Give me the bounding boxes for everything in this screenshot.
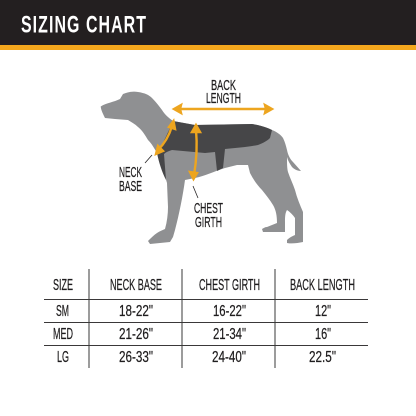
dog silhouette (101, 92, 303, 244)
row: MED: 21-26" (119, 326, 153, 343)
row: SM: SM (56, 303, 69, 320)
row: MED (53, 326, 331, 343)
row: SM (56, 303, 331, 320)
label: chest girth: CHEST (194, 200, 223, 217)
table header row: SIZE (53, 277, 73, 294)
table header row: NECK BASE (110, 277, 162, 294)
dog diagram (101, 77, 303, 244)
table header row: CHEST GIRTH (199, 277, 260, 294)
arrow: chest girth (190, 125, 200, 179)
label: back length: LENGTH (206, 90, 241, 107)
row: LG: LG (57, 349, 69, 366)
label: neck base: NECK (119, 164, 142, 181)
harness vest (157, 121, 272, 180)
label: chest girth: GIRTH (195, 214, 222, 231)
table header row (53, 277, 355, 294)
table grid (44, 269, 368, 368)
row: MED: MED (53, 326, 73, 343)
label: back length: BACK (211, 77, 236, 94)
label: neck base: BASE (119, 178, 142, 195)
row: SM: 12" (315, 303, 331, 320)
row: SM: 18-22" (119, 303, 153, 320)
row: MED: 21-34" (213, 326, 246, 343)
header band (0, 0, 416, 50)
label: back length (206, 77, 241, 107)
row: LG (57, 349, 336, 366)
label: neck base (119, 155, 152, 195)
title: SIZING CHART (21, 12, 147, 38)
arrow: neck base (156, 121, 175, 154)
row: SM: 16-22" (213, 303, 246, 320)
arrow: back length (174, 105, 272, 113)
row: LG: 26-33" (119, 349, 153, 366)
row: LG: 22.5" (309, 349, 336, 366)
label: chest girth (193, 186, 223, 231)
row: LG: 24-40" (212, 349, 246, 366)
row: MED: 16" (315, 326, 331, 343)
table header row: BACK LENGTH (290, 277, 355, 294)
sizing table (44, 269, 368, 368)
